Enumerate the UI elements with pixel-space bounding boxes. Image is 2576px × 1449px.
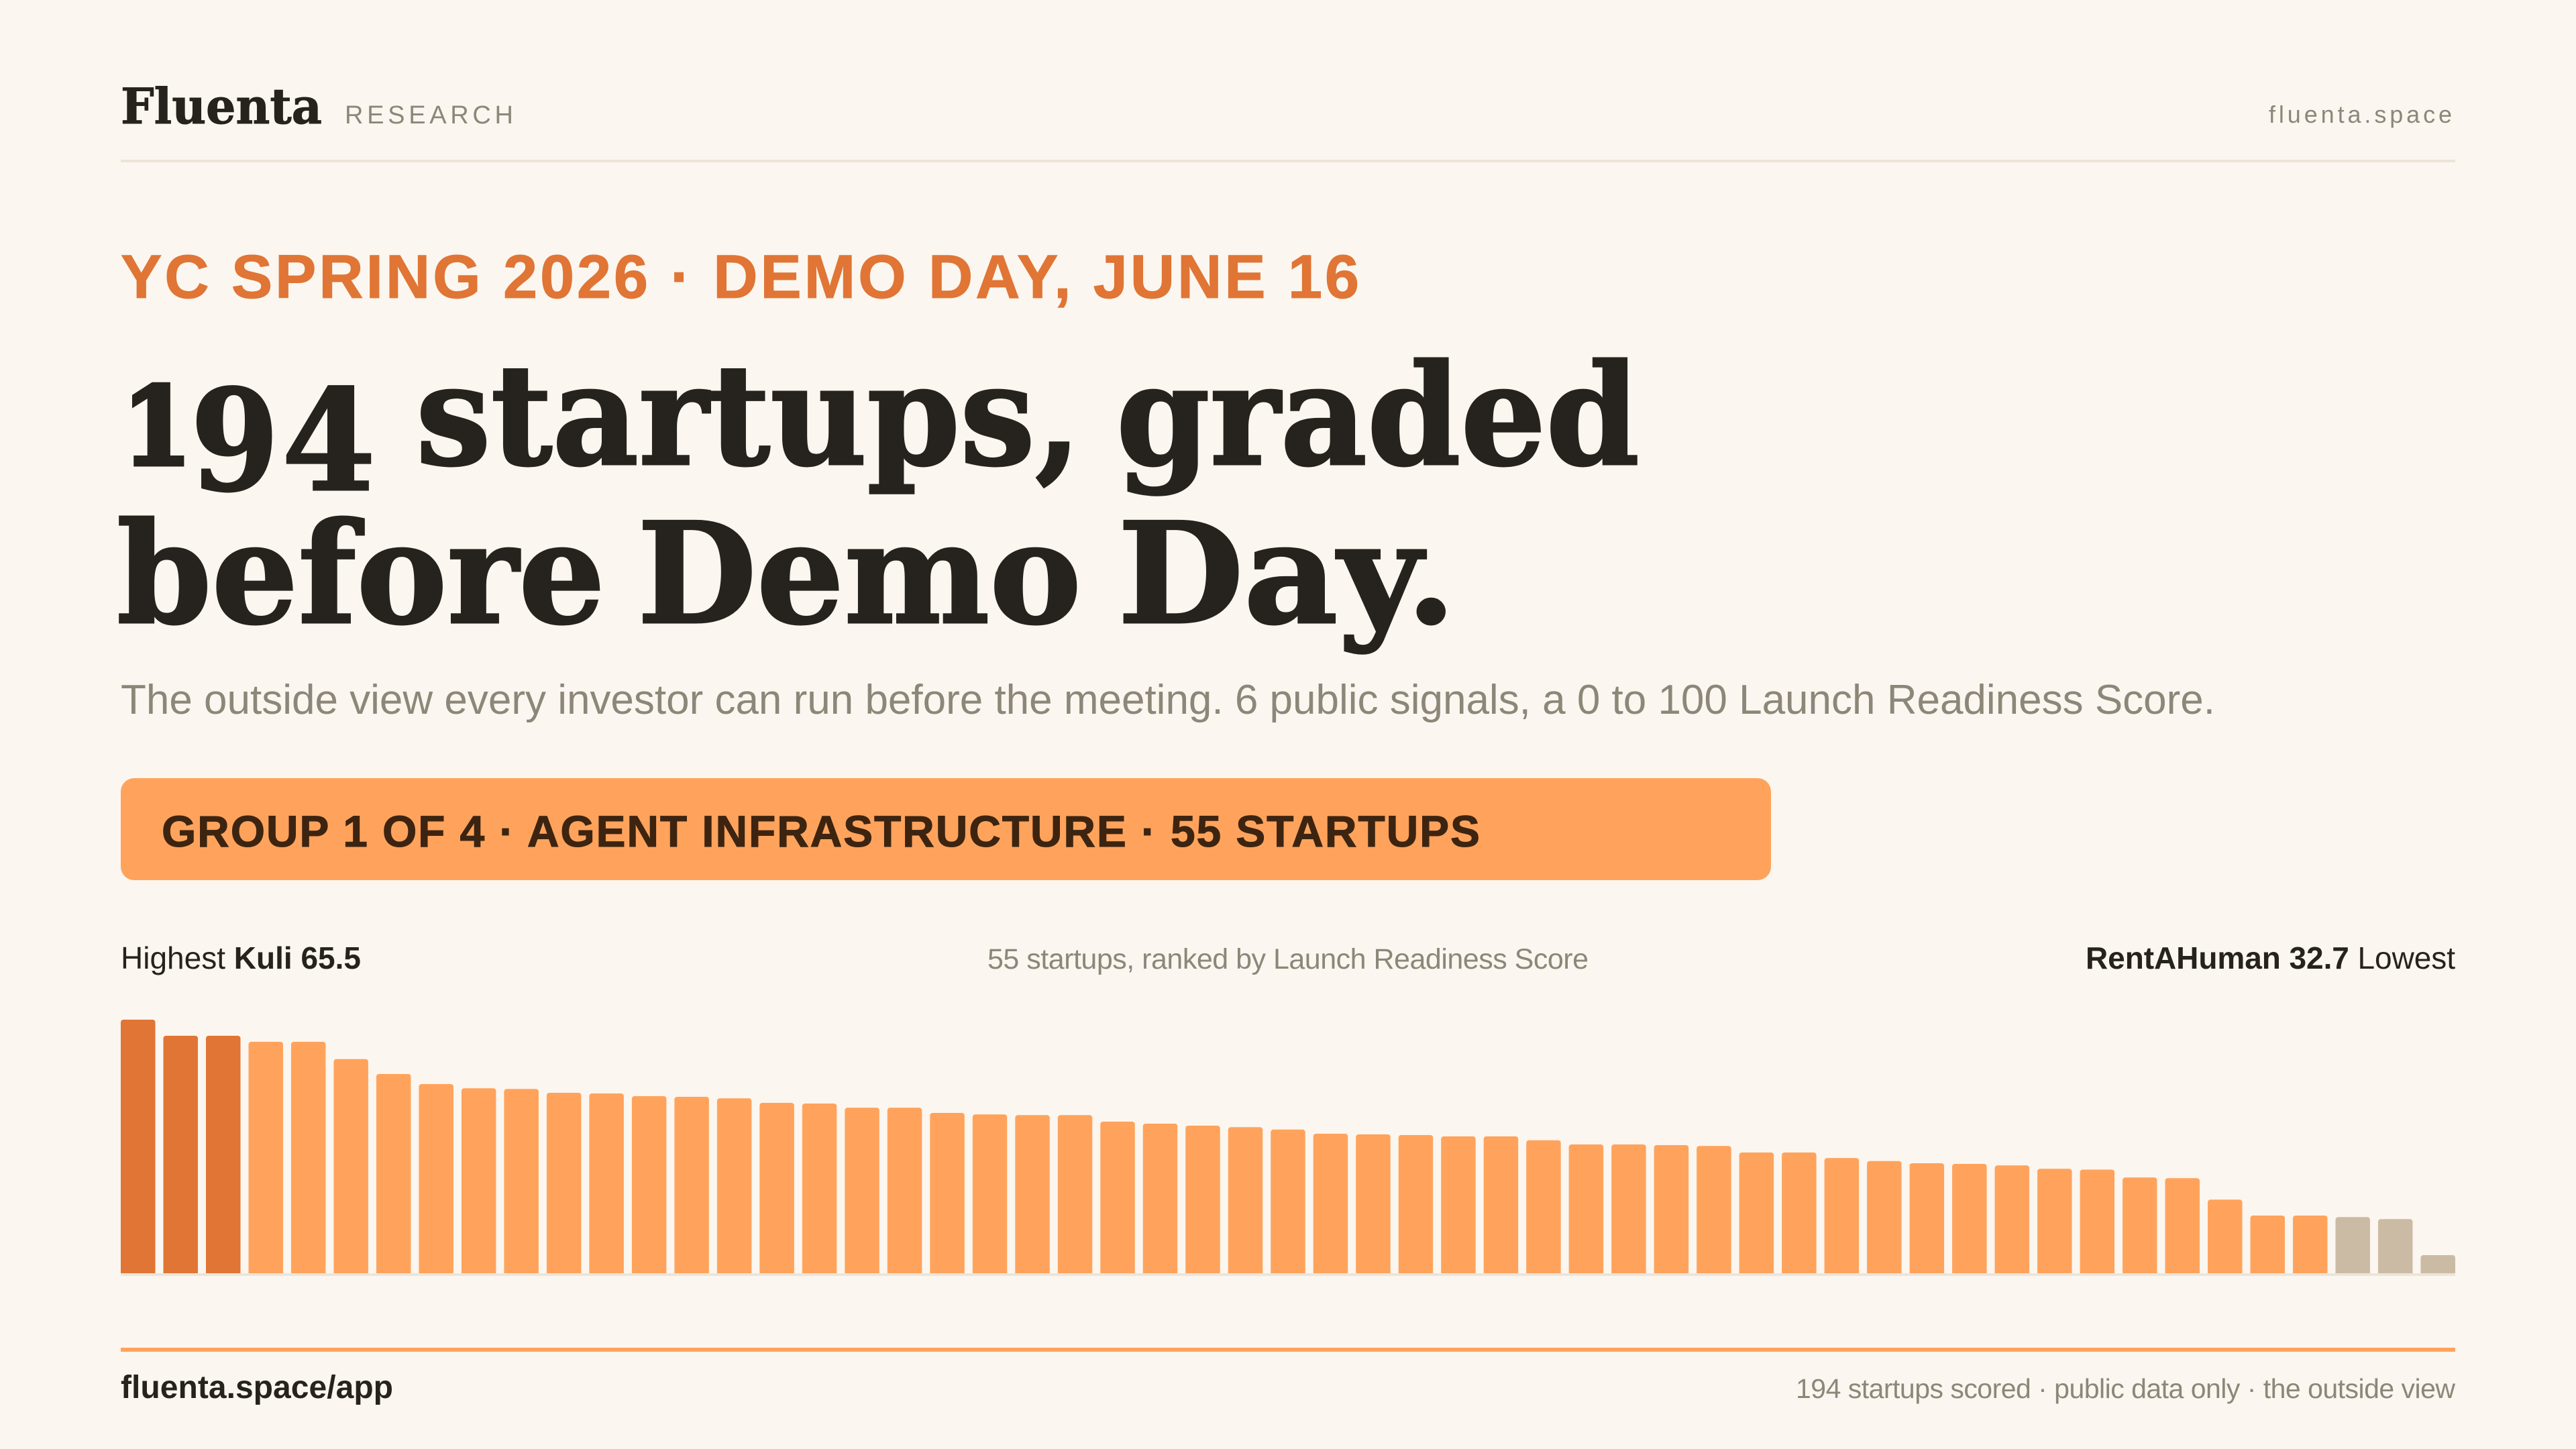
- eyebrow: YC SPRING 2026 · DEMO DAY, JUNE 16: [121, 243, 1359, 311]
- subtitle: The outside view every investor can run before the meeting. 6 public signals, a 0 to 100 Launch Readiness Score.: [121, 677, 2215, 723]
- banner label: GROUP 1 OF 4 · AGENT INFRASTRUCTURE · 55 STARTUPS: [162, 806, 1480, 856]
- chart caption: 55 startups, ranked by Launch Readiness Score: [987, 943, 1589, 975]
- footer link: fluenta.space/app: [121, 1370, 393, 1405]
- footer note: 194 startups scored · public data only · the outside view: [1796, 1373, 2455, 1404]
- title: startups,: [416, 334, 1081, 498]
- title: 4: [282, 360, 376, 523]
- title: 9: [191, 360, 279, 523]
- footer: [121, 1348, 2455, 1405]
- title: before: [117, 492, 605, 656]
- site url: fluenta.space: [2269, 101, 2452, 128]
- title: graded: [1116, 334, 1640, 498]
- title: Demo: [637, 492, 1081, 656]
- highest label: Highest Kuli 65.5: [121, 941, 361, 975]
- lowest label: RentAHuman 32.7 Lowest: [2086, 941, 2455, 975]
- group banner: [121, 778, 1771, 880]
- header: [121, 78, 2455, 162]
- brand logo: Fluenta: Fluenta: [121, 78, 322, 136]
- title: 1: [122, 364, 192, 490]
- brand descriptor: RESEARCH: RESEARCH: [345, 101, 513, 129]
- bar chart: 55 startups ranked: [121, 1020, 2455, 1276]
- title: Day.: [1118, 492, 1456, 656]
